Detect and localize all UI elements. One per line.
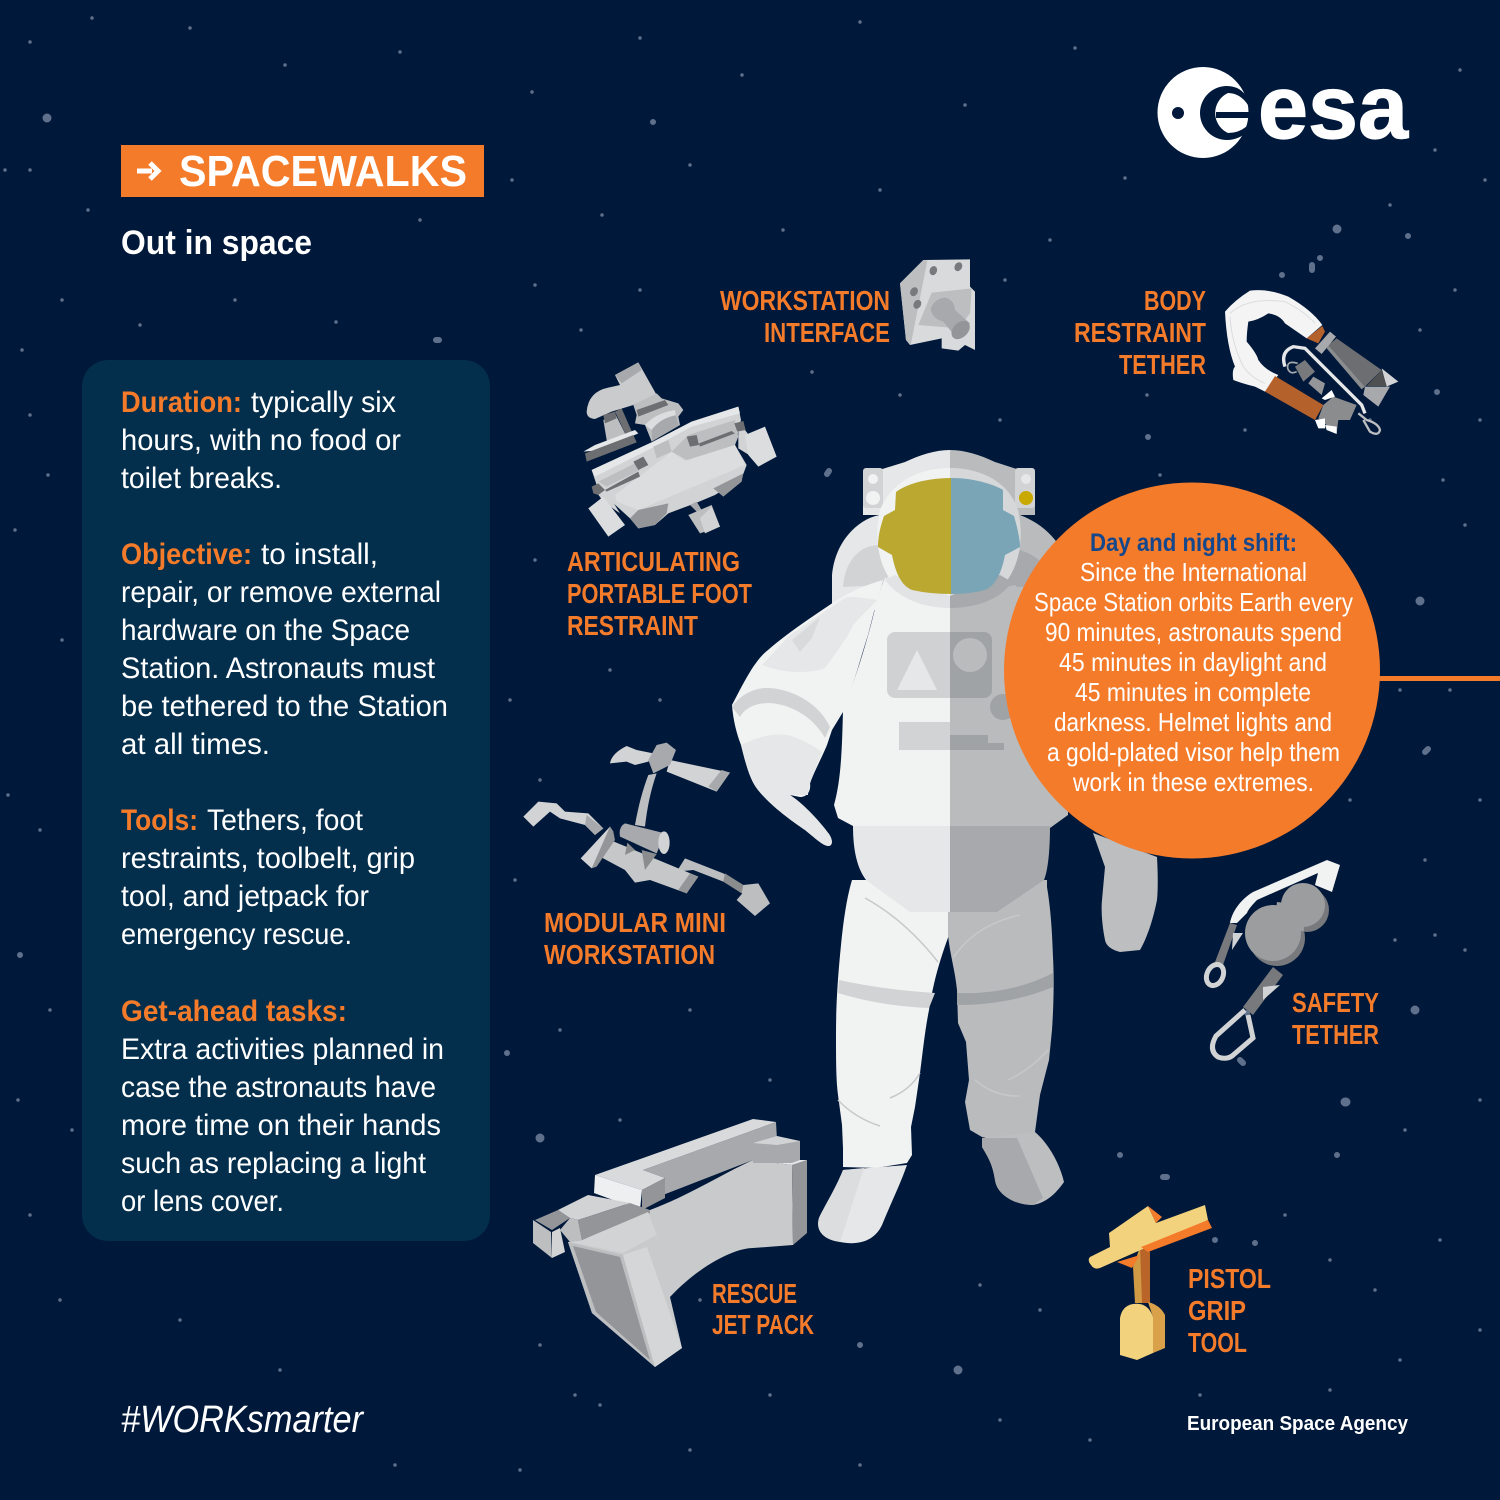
- label: rescue jet pack: JET PACK: [712, 1309, 814, 1340]
- text: objective: Station. Astronauts must: [121, 652, 436, 685]
- label: rescue jet pack: RESCUE: [712, 1278, 797, 1309]
- text: tools: [121, 804, 415, 951]
- text: tools: Tools:: [121, 804, 198, 837]
- text: duration: [121, 386, 401, 495]
- label: pistol grip tool: GRIP: [1188, 1295, 1246, 1326]
- text: get-ahead tasks: Get-ahead tasks:: [121, 995, 347, 1028]
- right glove: [1093, 833, 1158, 952]
- text: objective: at all times.: [121, 728, 270, 761]
- label: body restraint tether: BODY: [1144, 285, 1206, 316]
- chest control panel: [887, 632, 1016, 750]
- text: get-ahead tasks: [121, 995, 444, 1218]
- label: rescue jet pack: [712, 1278, 814, 1340]
- text: objective: Objective:: [121, 538, 252, 571]
- callout text: darkness. Helmet lights and: [1054, 707, 1332, 737]
- callout text: Space Station orbits Earth every: [1034, 587, 1353, 617]
- label: safety tether: [1292, 987, 1379, 1050]
- icon: modular mini workstation: [523, 743, 770, 916]
- label: workstation interface: [720, 285, 890, 348]
- text: get-ahead tasks: Extra activities planned in: [121, 1033, 444, 1066]
- text: objective: be tethered to the Station: [121, 690, 448, 723]
- backpack shoulders: [832, 515, 1075, 610]
- text: objective: repair, or remove external: [121, 576, 441, 609]
- label: articulating portable foot restraint: ARTICULATING: [567, 546, 740, 577]
- text: get-ahead tasks: case the astronauts have: [121, 1071, 436, 1104]
- title badge: [121, 145, 484, 197]
- text: duration: toilet breaks.: [121, 462, 282, 495]
- label: articulating portable foot restraint: [567, 546, 752, 641]
- text: get-ahead tasks: such as replacing a light: [121, 1147, 427, 1180]
- label: articulating portable foot restraint: PORTABLE FOOT: [567, 578, 752, 609]
- callout text: Since the International: [1080, 557, 1307, 587]
- icon: safety tether: [1203, 860, 1340, 1058]
- text: get-ahead tasks: or lens cover.: [121, 1185, 284, 1218]
- callout text: work in these extremes.: [1072, 767, 1314, 797]
- label: pistol grip tool: TOOL: [1188, 1327, 1247, 1358]
- icon: arrow: [137, 163, 158, 179]
- text: tools: restraints, toolbelt, grip: [121, 842, 415, 875]
- label: body restraint tether: TETHER: [1119, 349, 1206, 380]
- label: pistol grip tool: PISTOL: [1188, 1263, 1271, 1294]
- label: body restraint tether: RESTRAINT: [1074, 317, 1206, 348]
- text: objective: hardware on the Space: [121, 614, 410, 647]
- legs: [836, 880, 1054, 1168]
- torso: [834, 578, 1070, 912]
- icon: workstation interface: [900, 259, 975, 351]
- connector line: [1375, 676, 1500, 681]
- panel: facts: [82, 360, 490, 1241]
- icon: rescue jet pack: [533, 1119, 807, 1367]
- logo: esa: [1158, 58, 1409, 158]
- visor: [878, 478, 1020, 594]
- subtitle: Out in space: [121, 224, 312, 262]
- helmet: [877, 468, 1021, 608]
- label: modular mini workstation: WORKSTATION: [544, 939, 715, 970]
- left arm: [732, 580, 883, 846]
- label: articulating portable foot restraint: RESTRAINT: [567, 610, 698, 641]
- hashtag: #WORKsmarter: [121, 1399, 364, 1441]
- label: body restraint tether: [1074, 285, 1206, 380]
- callout text: 90 minutes, astronauts spend: [1045, 617, 1342, 647]
- label: pistol grip tool: [1188, 1263, 1271, 1358]
- callout text: 45 minutes in daylight and: [1059, 647, 1327, 677]
- callout heading: Day and night shift:: [1090, 529, 1297, 557]
- callout text: 45 minutes in complete: [1075, 677, 1311, 707]
- icon: pistol grip tool: [1089, 1205, 1212, 1360]
- icon: body restraint tether: [1225, 290, 1398, 434]
- credit: European Space Agency: [1187, 1413, 1409, 1435]
- astronaut: [732, 450, 1158, 1243]
- text: duration: Duration:: [121, 386, 242, 419]
- title: SPACEWALKS: [179, 147, 467, 196]
- label: workstation interface: INTERFACE: [764, 317, 890, 348]
- text: tools: emergency rescue.: [121, 918, 352, 951]
- text: objective: to install,: [261, 538, 378, 571]
- label: workstation interface: WORKSTATION: [720, 285, 890, 316]
- text: tools: tool, and jetpack for: [121, 880, 369, 913]
- callout text: a gold-plated visor help them: [1047, 737, 1340, 767]
- label: modular mini workstation: MODULAR MINI: [544, 907, 726, 938]
- text: duration: typically six: [251, 386, 396, 419]
- text: duration: hours, with no food or: [121, 424, 401, 457]
- label: safety tether: TETHER: [1292, 1019, 1379, 1050]
- text: get-ahead tasks: more time on their hands: [121, 1109, 441, 1142]
- text: objective: [121, 538, 448, 761]
- helmet mounts: [863, 450, 1035, 515]
- icon: articulating portable foot restraint: [583, 362, 777, 537]
- boots: [818, 1132, 1064, 1243]
- callout text: [1034, 557, 1353, 797]
- callout circle: [1004, 482, 1380, 858]
- logo: esa: esa: [1258, 58, 1409, 158]
- label: safety tether: SAFETY: [1292, 987, 1379, 1018]
- label: modular mini workstation: [544, 907, 726, 970]
- text: tools: Tethers, foot: [207, 804, 364, 837]
